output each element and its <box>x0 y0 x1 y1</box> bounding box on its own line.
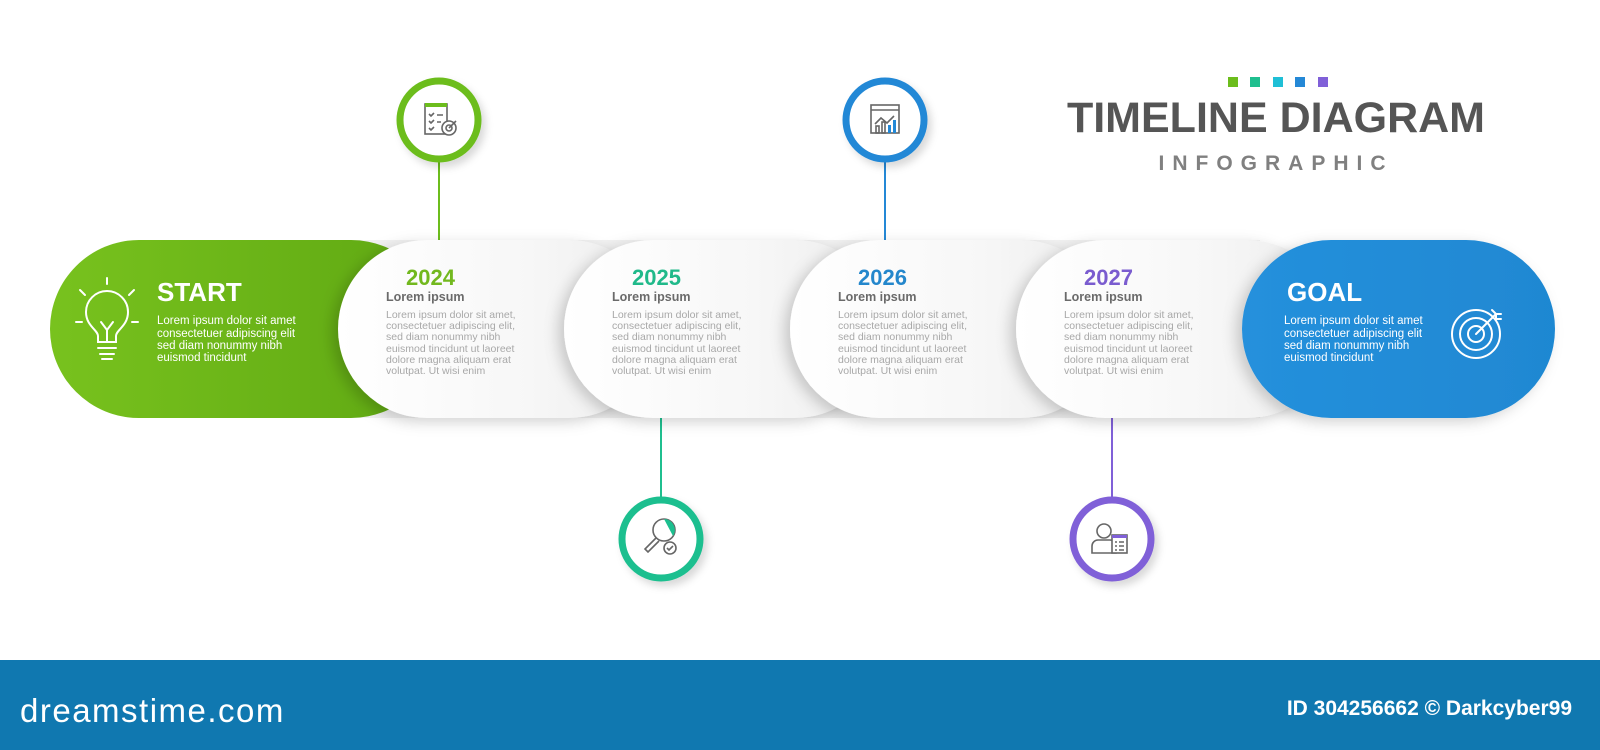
text: start body: consectetuer adipiscing elit <box>157 328 296 340</box>
panel: 2025: 2025 <box>632 265 681 290</box>
panel: 2027: sed diam nonummy nibh <box>1064 331 1179 343</box>
panel: goal: GOAL <box>1287 277 1362 307</box>
footer bar <box>0 660 1600 750</box>
icon circle: 2025 <box>622 500 700 578</box>
panel: 2026: Lorem ipsum dolor sit amet, <box>838 309 968 321</box>
panel: 2025: dolore magna aliquam erat <box>612 354 737 366</box>
panel: 2025: consectetuer adipiscing elit, <box>612 320 741 332</box>
text: start body: Lorem ipsum dolor sit amet <box>157 315 296 327</box>
icon: target <box>1452 310 1501 358</box>
panel: 2024: volutpat. Ut wisi enim <box>386 365 485 377</box>
color squares <box>1228 77 1328 87</box>
connector lines <box>439 160 1112 497</box>
panel: 2026: sed diam nonummy nibh <box>838 331 953 343</box>
panel: 2024: dolore magna aliquam erat <box>386 354 511 366</box>
footer: id text: ID 304256662 © Darkcyber99 <box>1287 697 1572 720</box>
panel: 2024: Lorem ipsum <box>386 290 464 304</box>
panel: 2027 <box>1016 240 1336 418</box>
panel: goal <box>1242 240 1555 418</box>
panel: 2025: sed diam nonummy nibh <box>612 331 727 343</box>
panel: 2025 <box>564 240 884 418</box>
text: start body: euismod tincidunt <box>157 352 247 364</box>
panel: 2026 <box>790 240 1110 418</box>
panel: goal: Lorem ipsum dolor sit amet <box>1284 315 1423 327</box>
title: TIMELINE DIAGRAM <box>1067 94 1485 142</box>
panel: 2026: euismod tincidunt ut laoreet <box>838 343 966 355</box>
text: start body: sed diam nonummy nibh <box>157 340 282 352</box>
panel: 2027: Lorem ipsum <box>1064 290 1142 304</box>
panel: 2027: euismod tincidunt ut laoreet <box>1064 343 1192 355</box>
panel: goal: euismod tincidunt <box>1284 352 1374 364</box>
footer: logo text: dreamstime.com <box>20 692 285 729</box>
panel: 2027: 2027 <box>1084 265 1133 290</box>
panel: 2024: sed diam nonummy nibh <box>386 331 501 343</box>
panel: 2024: Lorem ipsum dolor sit amet, <box>386 309 516 321</box>
panel: 2027: consectetuer adipiscing elit, <box>1064 320 1193 332</box>
panel: 2025: euismod tincidunt ut laoreet <box>612 343 740 355</box>
panel: 2024: euismod tincidunt ut laoreet <box>386 343 514 355</box>
panel: 2026: volutpat. Ut wisi enim <box>838 365 937 377</box>
panel: 2027: dolore magna aliquam erat <box>1064 354 1189 366</box>
panel: 2027: volutpat. Ut wisi enim <box>1064 365 1163 377</box>
panel: 2026: 2026 <box>858 265 907 290</box>
icon circle: 2026 <box>846 81 924 159</box>
panel: goal: sed diam nonummy nibh <box>1284 340 1409 352</box>
panel: 2024 <box>338 240 658 418</box>
icon circle: 2024 <box>400 81 478 159</box>
panel: 2024: 2024 <box>406 265 456 290</box>
icon: light bulb <box>76 278 138 359</box>
heading: START: START <box>157 277 242 307</box>
panel: 2027: Lorem ipsum dolor sit amet, <box>1064 309 1194 321</box>
panel: 2025: Lorem ipsum dolor sit amet, <box>612 309 742 321</box>
panel: 2026: consectetuer adipiscing elit, <box>838 320 967 332</box>
panel: 2025: volutpat. Ut wisi enim <box>612 365 711 377</box>
subtitle: INFOGRAPHIC <box>1158 152 1394 175</box>
panel: start <box>50 240 440 418</box>
timeline bar <box>50 240 1555 418</box>
panel: 2026: dolore magna aliquam erat <box>838 354 963 366</box>
icon circle: 2027 <box>1073 500 1151 578</box>
panel: 2026: Lorem ipsum <box>838 290 916 304</box>
panel: goal: consectetuer adipiscing elit <box>1284 328 1423 340</box>
panel: 2024: consectetuer adipiscing elit, <box>386 320 515 332</box>
panel: 2025: Lorem ipsum <box>612 290 690 304</box>
